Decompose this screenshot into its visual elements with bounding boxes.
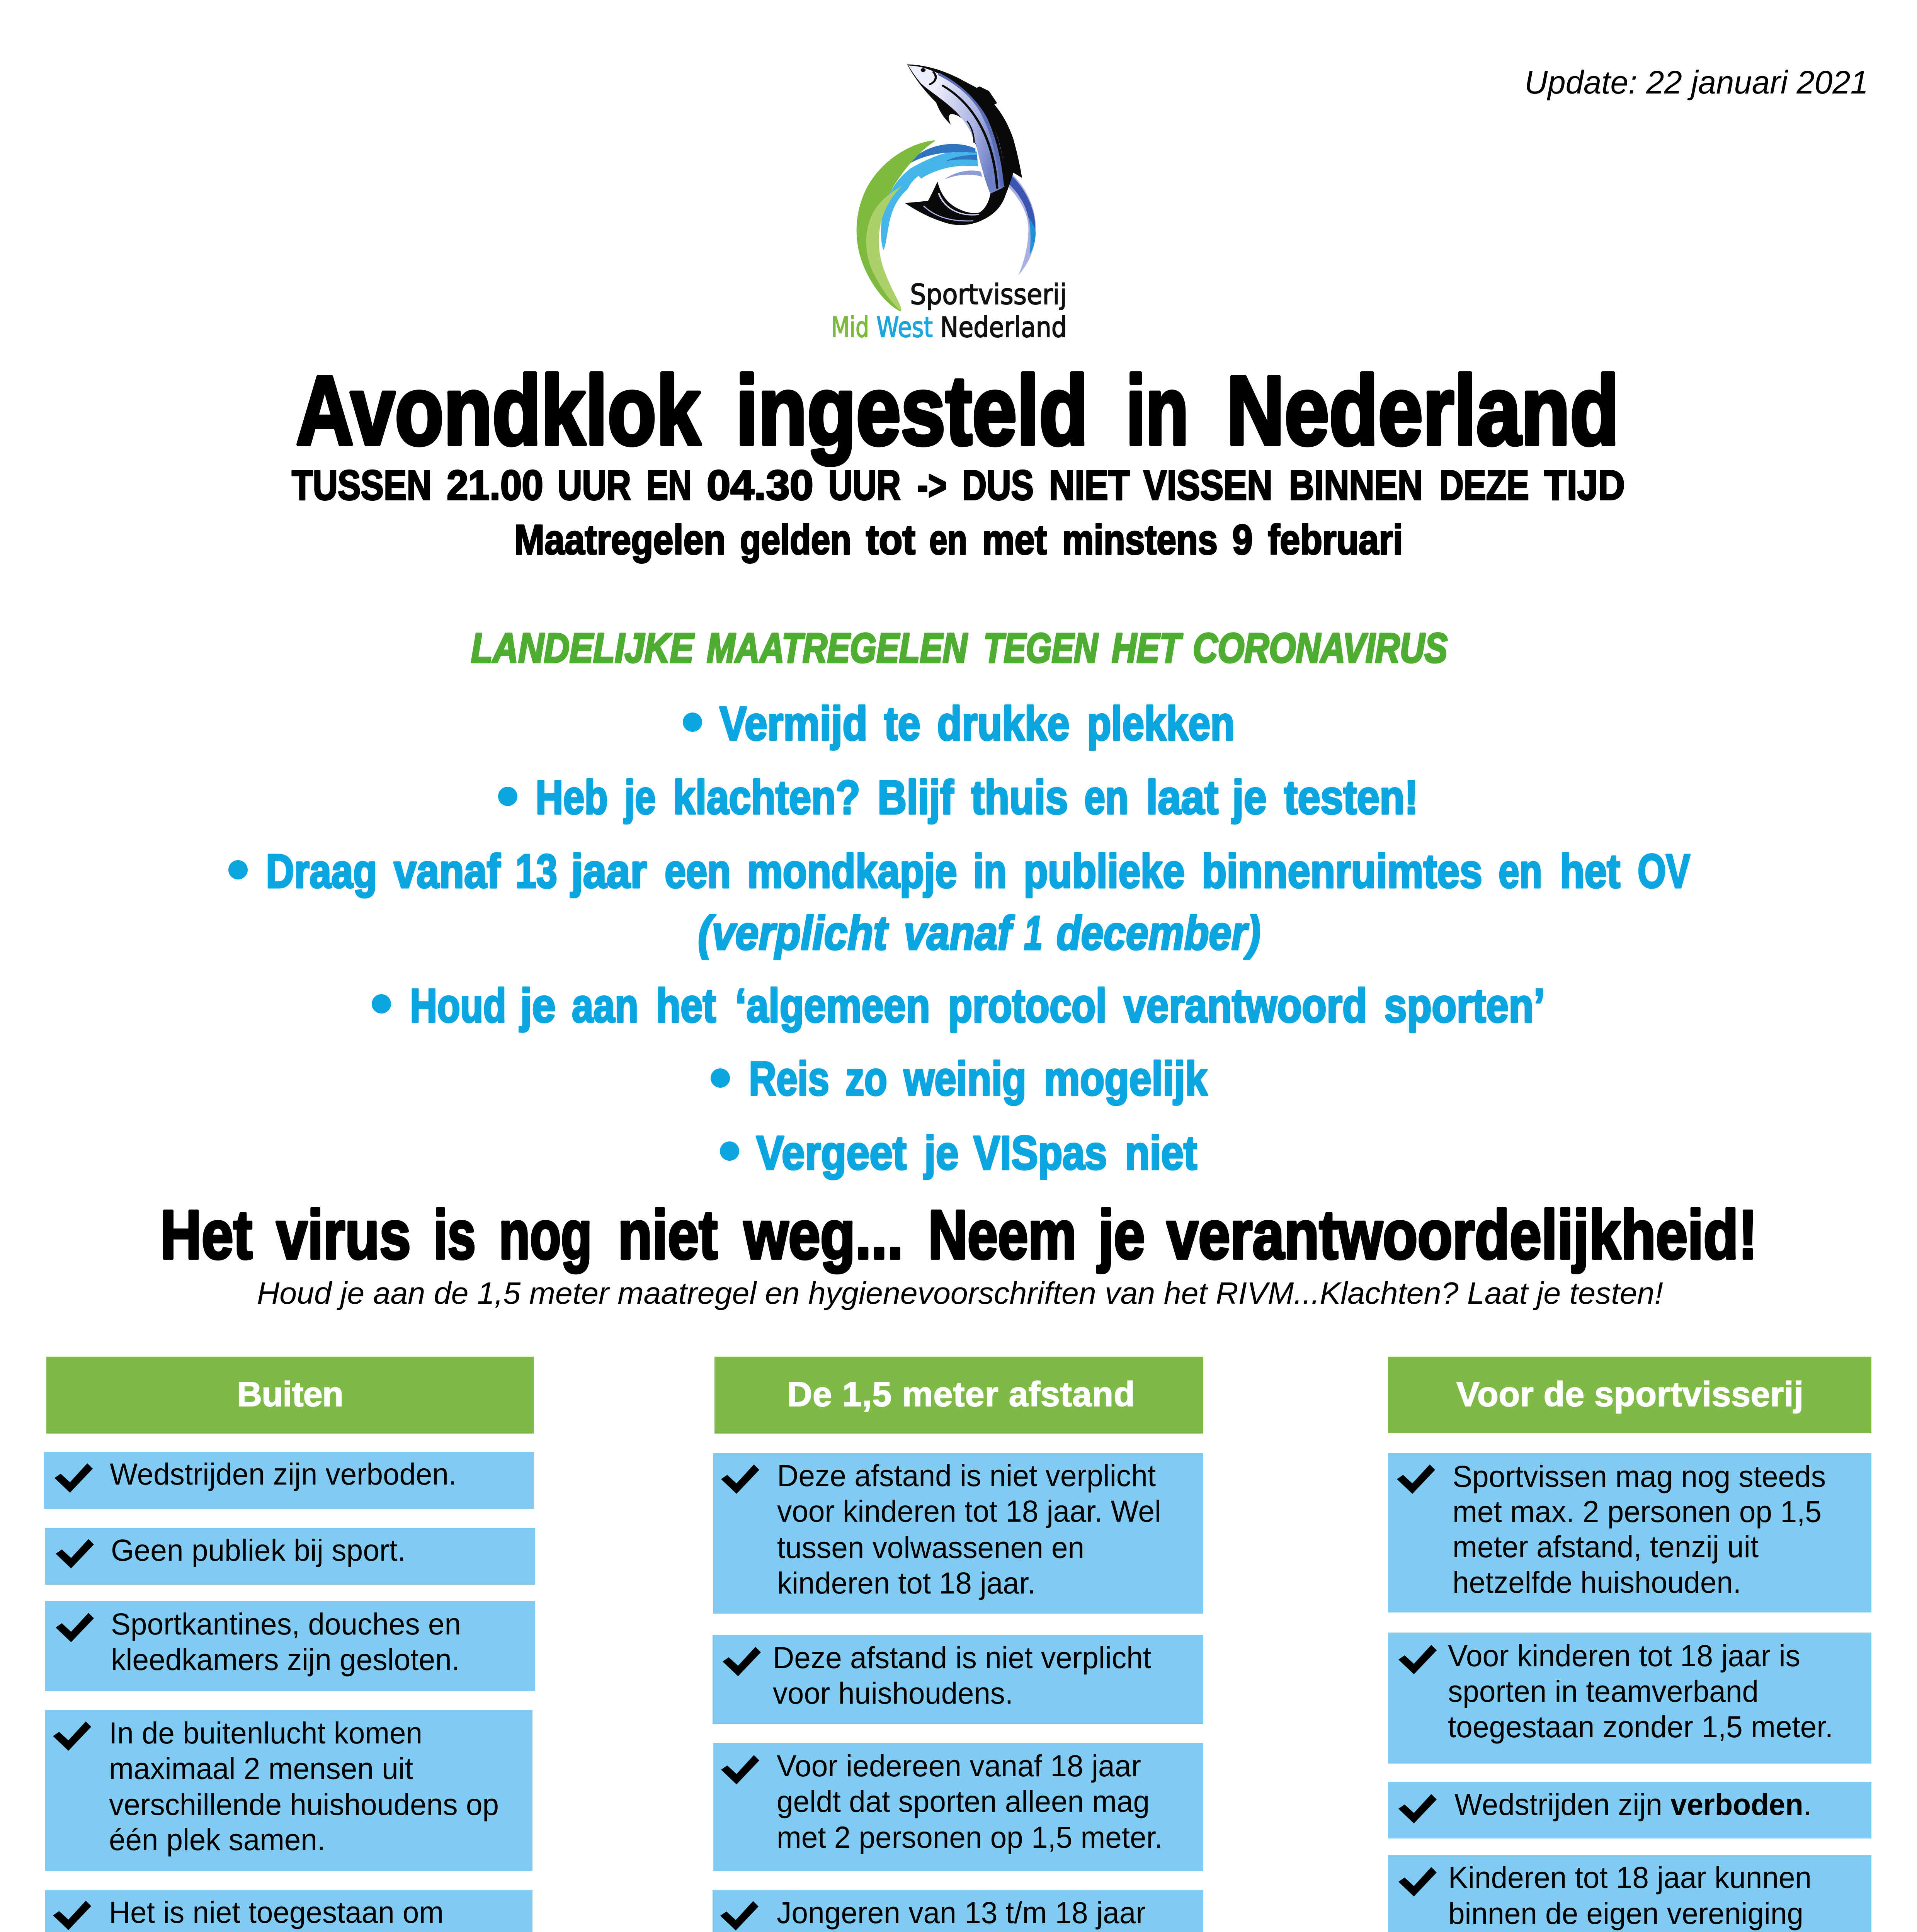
measure 6 <box>720 1127 1197 1180</box>
item: Deze afstand is niet verplicht <box>777 1458 1156 1493</box>
subtitle: times: UUR <box>558 462 631 509</box>
subtitle: times: 21.00 <box>447 462 543 509</box>
item: maximaal 2 mensen uit <box>109 1751 413 1786</box>
measure 3: jaar <box>570 845 647 898</box>
slogan: nog <box>499 1196 592 1273</box>
item: In de buitenlucht komen <box>109 1716 422 1750</box>
measure 4 <box>372 980 1545 1032</box>
measure 2: thuis <box>971 771 1068 824</box>
item: geldt dat sporten alleen mag <box>777 1784 1150 1818</box>
measure 1 <box>683 697 1235 750</box>
heading: Voor de sportvisserij <box>1388 1357 1871 1433</box>
measure 5: weinig <box>903 1053 1026 1105</box>
subtitle: times: DEZE <box>1439 462 1529 509</box>
heading: national measures: MAATREGELEN <box>707 624 968 671</box>
logo text: Sportvisserij: Sportvisserij <box>910 278 1067 311</box>
measure 2: testen! <box>1284 771 1418 824</box>
heading: Voor de sportvisserij: Voor de sportvisserij <box>1456 1375 1803 1414</box>
measure 5: mogelijk <box>1044 1053 1208 1105</box>
item <box>713 1743 1203 1871</box>
measure 4: aan <box>572 980 638 1032</box>
subtitle: times: UUR <box>828 462 901 509</box>
item <box>1388 1453 1871 1612</box>
item: tussen volwassenen en <box>777 1530 1084 1565</box>
item: voor huishoudens. <box>773 1676 1013 1710</box>
item: sporten in teamverband <box>1448 1674 1759 1708</box>
measure 6: VISpas <box>973 1127 1107 1180</box>
measure 2: klachten? <box>673 771 860 824</box>
measure 3: in <box>973 845 1007 898</box>
RIVM note: Houd je aan de 1,5 meter maatregel en hygienevoorschriften van het RIVM...Klachten? Laat je testen! <box>257 1276 1663 1310</box>
subtitle: validity: minstens <box>1062 516 1218 563</box>
item <box>1388 1782 1871 1838</box>
item: meter afstand, tenzij uit <box>1453 1529 1759 1564</box>
measure 1: te <box>884 697 920 750</box>
update date: Update: 22 januari 2021 <box>1524 64 1868 100</box>
measure 3: Draag <box>266 845 377 898</box>
measure 3: vanaf <box>904 907 1015 960</box>
heading: national measures: LANDELIJKE <box>471 624 695 671</box>
measure 5: zo <box>845 1053 887 1105</box>
logo text: MidWest Nederland: Mid <box>831 311 869 344</box>
logo: Sportvisserij MidWest Nederland <box>831 65 1067 344</box>
measure 6: niet <box>1125 1127 1197 1180</box>
item: hetzelfde huishouden. <box>1453 1565 1741 1599</box>
item <box>713 1453 1203 1614</box>
subtitle: times: VISSEN <box>1143 462 1272 509</box>
title: in <box>1126 355 1189 465</box>
measure 3: 1 <box>1024 907 1043 960</box>
title: Avondklok <box>296 355 701 465</box>
measure 2: Heb <box>536 771 608 824</box>
measure 4: protocol <box>948 980 1107 1032</box>
subtitle: validity: tot <box>866 516 915 563</box>
item: Het is niet toegestaan om <box>109 1895 444 1929</box>
heading: Buiten: Buiten <box>237 1375 344 1414</box>
logo text: MidWest Nederland: West <box>876 311 933 344</box>
measure 3: 13 <box>515 845 557 898</box>
item: toegestaan zonder 1,5 meter. <box>1448 1709 1833 1744</box>
measure 3 <box>228 845 1690 960</box>
measure 3: publieke <box>1024 845 1185 898</box>
icon: fish and waves <box>857 65 1036 311</box>
heading: national measures: TEGEN <box>983 624 1099 671</box>
measure 4: ‘algemeen <box>735 980 930 1032</box>
item <box>45 1601 535 1691</box>
measure 3: december) <box>1056 907 1260 960</box>
item: Geen publiek bij sport. <box>111 1533 406 1567</box>
heading: Buiten <box>46 1357 534 1434</box>
slogan: verantwoordelijkheid! <box>1167 1196 1757 1273</box>
measure 3: het <box>1560 845 1620 898</box>
measure 4: je <box>519 980 556 1032</box>
item: binnen de eigen vereniging <box>1448 1896 1803 1930</box>
measure 2: Blijf <box>878 771 954 824</box>
title: ingesteld <box>736 355 1088 465</box>
subtitle: times: DUS <box>962 462 1034 509</box>
subtitle: times: TIJD <box>1544 462 1625 509</box>
item: Sportkantines, douches en <box>111 1607 461 1641</box>
panel: Buiten <box>44 1357 535 1932</box>
measure 3: vanaf <box>394 845 501 898</box>
subtitle: validity: Maatregelen <box>514 516 726 563</box>
measure 2 <box>498 771 1418 824</box>
measures list <box>228 697 1690 1180</box>
item: Deze afstand is niet verplicht <box>773 1640 1151 1675</box>
logo text: MidWest Nederland <box>831 311 1067 344</box>
subtitle: times: EN <box>646 462 692 509</box>
measure 4: Houd <box>410 980 506 1032</box>
item <box>1388 1633 1871 1764</box>
measure 5: Reis <box>749 1053 829 1105</box>
subtitle: times: TUSSEN <box>292 462 432 509</box>
item <box>713 1890 1203 1932</box>
measure 1: Vermijd <box>720 697 867 750</box>
item: met 2 personen op 1,5 meter. <box>777 1820 1163 1854</box>
subtitle: times: BINNEN <box>1289 462 1423 509</box>
measure 3: binnenruimtes <box>1202 845 1482 898</box>
measure 4: sporten’ <box>1384 980 1545 1032</box>
subtitle: validity: 9 <box>1232 516 1253 563</box>
heading: De 1,5 meter afstand: De 1,5 meter afstand <box>787 1375 1135 1414</box>
slogan: Neem <box>928 1196 1077 1273</box>
title <box>296 355 1619 465</box>
item: Kinderen tot 18 jaar kunnen <box>1448 1860 1812 1895</box>
item <box>45 1528 535 1585</box>
heading: De 1,5 meter afstand <box>714 1357 1203 1434</box>
measure 2: je <box>1232 771 1267 824</box>
logo text: MidWest Nederland: Nederland <box>940 311 1067 344</box>
item: met max. 2 personen op 1,5 <box>1453 1494 1822 1529</box>
item: Wedstrijden zijn verboden. <box>1454 1787 1812 1821</box>
item: Jongeren van 13 t/m 18 jaar <box>777 1895 1146 1930</box>
measure 2: je <box>624 771 656 824</box>
measure 3: mondkapje <box>747 845 957 898</box>
subtitle: times: 04.30 <box>707 462 813 509</box>
measure 2: en <box>1084 771 1128 824</box>
subtitle: validity: gelden <box>740 516 851 563</box>
slogan: niet <box>618 1196 718 1273</box>
subtitle: times: NIET <box>1049 462 1130 509</box>
item <box>45 1710 532 1871</box>
item: kleedkamers zijn gesloten. <box>111 1642 460 1677</box>
item <box>44 1452 534 1509</box>
subtitle: times: -> <box>917 462 947 509</box>
measure 4: verantwoord <box>1124 980 1367 1032</box>
panel: Voor de sportvisserij <box>1388 1357 1871 1932</box>
title: Nederland <box>1226 355 1619 465</box>
subtitle: validity: en <box>929 516 967 563</box>
measure 6: je <box>924 1127 959 1180</box>
subtitle: validity <box>514 516 1403 563</box>
heading: national measures: CORONAVIRUS <box>1193 624 1448 671</box>
slogan <box>160 1196 1757 1273</box>
heading: national measures <box>471 624 1448 671</box>
subtitle: validity: met <box>982 516 1047 563</box>
measure 3: een <box>665 845 731 898</box>
item: voor kinderen tot 18 jaar. Wel <box>777 1494 1161 1528</box>
measure 3: en <box>1499 845 1542 898</box>
measure 1: drukke <box>937 697 1070 750</box>
subtitle: times <box>292 462 1625 509</box>
item <box>45 1890 532 1932</box>
item: Voor iedereen vanaf 18 jaar <box>777 1748 1141 1783</box>
subtitle: validity: februari <box>1268 516 1403 563</box>
slogan: Het <box>160 1196 252 1273</box>
measure 3: OV <box>1638 845 1690 898</box>
measure 1: plekken <box>1087 697 1235 750</box>
item: Sportvissen mag nog steeds <box>1453 1459 1826 1493</box>
item: Voor kinderen tot 18 jaar is <box>1448 1638 1800 1673</box>
item: één plek samen. <box>109 1822 325 1857</box>
slogan: virus <box>276 1196 411 1273</box>
heading: national measures: HET <box>1112 624 1183 671</box>
measure 3: (verplicht <box>698 907 889 960</box>
measure 6: Vergeet <box>756 1127 907 1180</box>
measure 5 <box>711 1053 1208 1105</box>
item <box>713 1635 1203 1724</box>
slogan: weg... <box>743 1196 903 1273</box>
slogan: je <box>1097 1196 1145 1273</box>
item: verschillende huishoudens op <box>109 1787 499 1821</box>
item <box>1388 1855 1871 1932</box>
item: Wedstrijden zijn verboden. <box>110 1457 457 1491</box>
measure 2: laat <box>1146 771 1218 824</box>
panel: De 1,5 meter afstand <box>713 1357 1203 1932</box>
slogan: is <box>434 1196 476 1273</box>
item: kinderen tot 18 jaar. <box>777 1566 1036 1600</box>
measure 4: het <box>656 980 716 1032</box>
